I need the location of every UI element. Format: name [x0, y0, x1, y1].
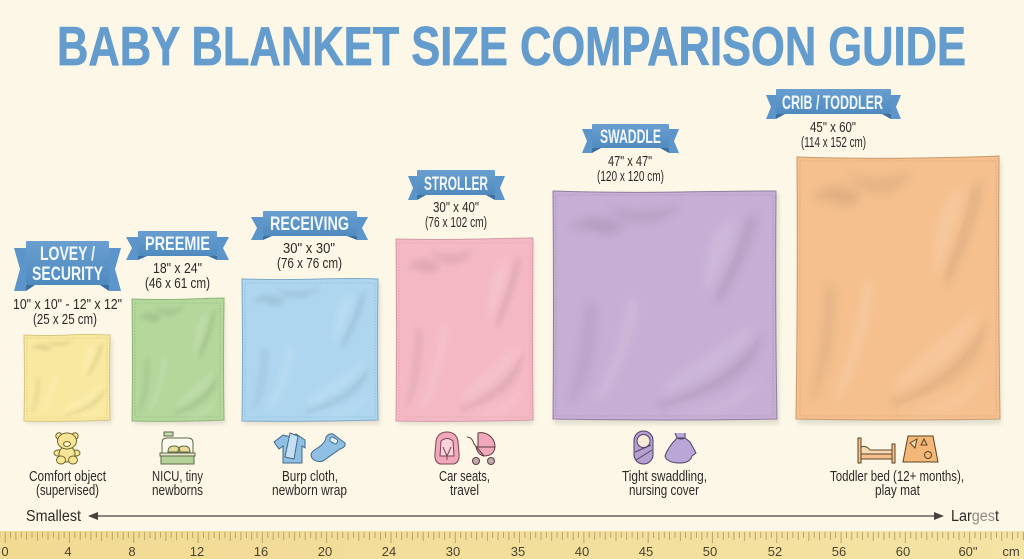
blanket: yellow lovey — [24, 334, 112, 423]
icon: swaddled baby — [634, 431, 653, 464]
caption: comfort object — [29, 469, 106, 499]
ruler: 60 — [896, 544, 910, 559]
dimensions: preemie — [145, 261, 210, 292]
ribbon: crib / toddler — [766, 89, 901, 119]
size arrow: smallest to largest: Smallest — [26, 508, 82, 525]
caption: car seats — [439, 469, 490, 499]
icon: teddy bear — [54, 433, 80, 464]
caption: comfort object: (supervised) — [36, 483, 99, 499]
ruler: 60" — [958, 544, 978, 559]
caption: burp cloth: Burp cloth, — [282, 469, 338, 485]
ruler — [0, 531, 1024, 559]
caption: nicu: NICU, tiny — [152, 469, 204, 485]
dimensions: stroller: (76 x 102 cm) — [425, 215, 487, 231]
dimensions: crib: 45" x 60" — [810, 120, 856, 136]
column: swaddle — [553, 124, 779, 499]
icon: pram — [467, 433, 495, 464]
caption: toddler bed: play mat — [875, 483, 920, 499]
blanket: purple swaddle — [553, 191, 779, 424]
size arrow: smallest to largest: Largest — [951, 508, 1000, 525]
ribbon: receiving — [251, 211, 368, 240]
column: crib / toddler — [766, 89, 1001, 499]
ruler: 20 — [318, 544, 332, 559]
ribbon: lovey / security: LOVEY / — [40, 243, 95, 265]
dimensions: swaddle: 47" x 47" — [608, 154, 652, 170]
dimensions: crib: (114 x 152 cm) — [801, 135, 866, 151]
dimensions: receiving — [277, 241, 342, 272]
ribbon: lovey / security: SECURITY — [32, 263, 103, 285]
ruler: 35 — [511, 544, 525, 559]
ribbon: preemie — [126, 231, 229, 260]
caption: swaddling: Tight swaddling, — [622, 469, 707, 485]
caption: burp cloth — [272, 469, 347, 499]
caption: nicu: newborns — [152, 483, 203, 499]
caption: car seats: Car seats, — [439, 469, 490, 485]
column: preemie — [126, 231, 229, 499]
icon: bib — [311, 434, 345, 462]
dimensions: lovey: (25 x 25 cm) — [33, 312, 97, 328]
column: lovey / security — [13, 241, 122, 499]
blanket: orange crib — [796, 156, 1001, 424]
ribbon: stroller — [408, 170, 505, 200]
dimensions: swaddle: (120 x 120 cm) — [597, 169, 664, 185]
ribbon: receiving: RECEIVING — [270, 213, 349, 235]
dimensions: stroller — [425, 200, 487, 231]
ruler: 30 — [446, 544, 460, 559]
blanket: pink stroller — [396, 238, 534, 424]
icon: nursing cover — [665, 433, 696, 463]
blanket: green preemie — [132, 298, 225, 424]
ruler: 45 — [639, 544, 653, 559]
caption: car seats: travel — [450, 483, 479, 499]
dimensions: lovey — [13, 297, 122, 328]
ruler: 40 — [575, 544, 589, 559]
dimensions: preemie: 18" x 24" — [153, 261, 202, 277]
dimensions: stroller: 30" x 40" — [433, 200, 479, 216]
ruler: 52 — [768, 544, 782, 559]
caption: nicu — [152, 469, 204, 499]
caption: burp cloth: newborn wrap — [272, 483, 347, 499]
ribbon: swaddle — [582, 124, 679, 153]
dimensions: preemie: (46 x 61 cm) — [145, 276, 210, 292]
column: receiving — [242, 211, 380, 499]
icon: burp cloth shirt — [274, 433, 305, 463]
dimensions: crib — [801, 120, 866, 151]
dimensions: swaddle — [597, 154, 664, 185]
size arrow: smallest to largest — [26, 508, 1000, 525]
ruler: 4 — [64, 544, 72, 559]
icon: toddler bed — [858, 438, 895, 463]
icon: car seat — [435, 432, 459, 464]
ruler: 16 — [254, 544, 268, 559]
caption: comfort object: Comfort object — [29, 469, 106, 485]
ribbon: crib / toddler: CRIB / TODDLER — [782, 92, 883, 114]
column: stroller — [396, 170, 534, 499]
blanket: blue receiving — [242, 278, 380, 424]
ribbon: lovey / security — [14, 241, 121, 291]
caption: swaddling: nursing cover — [629, 483, 699, 499]
ruler: cm — [1002, 544, 1020, 559]
dimensions: lovey: 10" x 10" - 12" x 12" — [13, 297, 122, 313]
ribbon: swaddle: SWADDLE — [600, 126, 661, 148]
ribbon: preemie: PREEMIE — [145, 233, 210, 255]
icon: incubator — [160, 432, 195, 464]
caption: swaddling — [622, 469, 707, 499]
ruler: 56 — [832, 544, 846, 559]
ruler: 8 — [128, 544, 136, 559]
dimensions: receiving: 30" x 30" — [283, 241, 335, 257]
ruler: 12 — [190, 544, 204, 559]
caption: toddler bed — [830, 469, 964, 499]
ribbon: stroller: STROLLER — [424, 173, 488, 195]
icon: play mat — [903, 436, 938, 462]
ruler: 50 — [703, 544, 717, 559]
ruler: 24 — [382, 544, 396, 559]
dimensions: receiving: (76 x 76 cm) — [277, 256, 342, 272]
ruler: 0 — [1, 544, 9, 559]
caption: toddler bed: Toddler bed (12+ months), — [830, 469, 964, 485]
